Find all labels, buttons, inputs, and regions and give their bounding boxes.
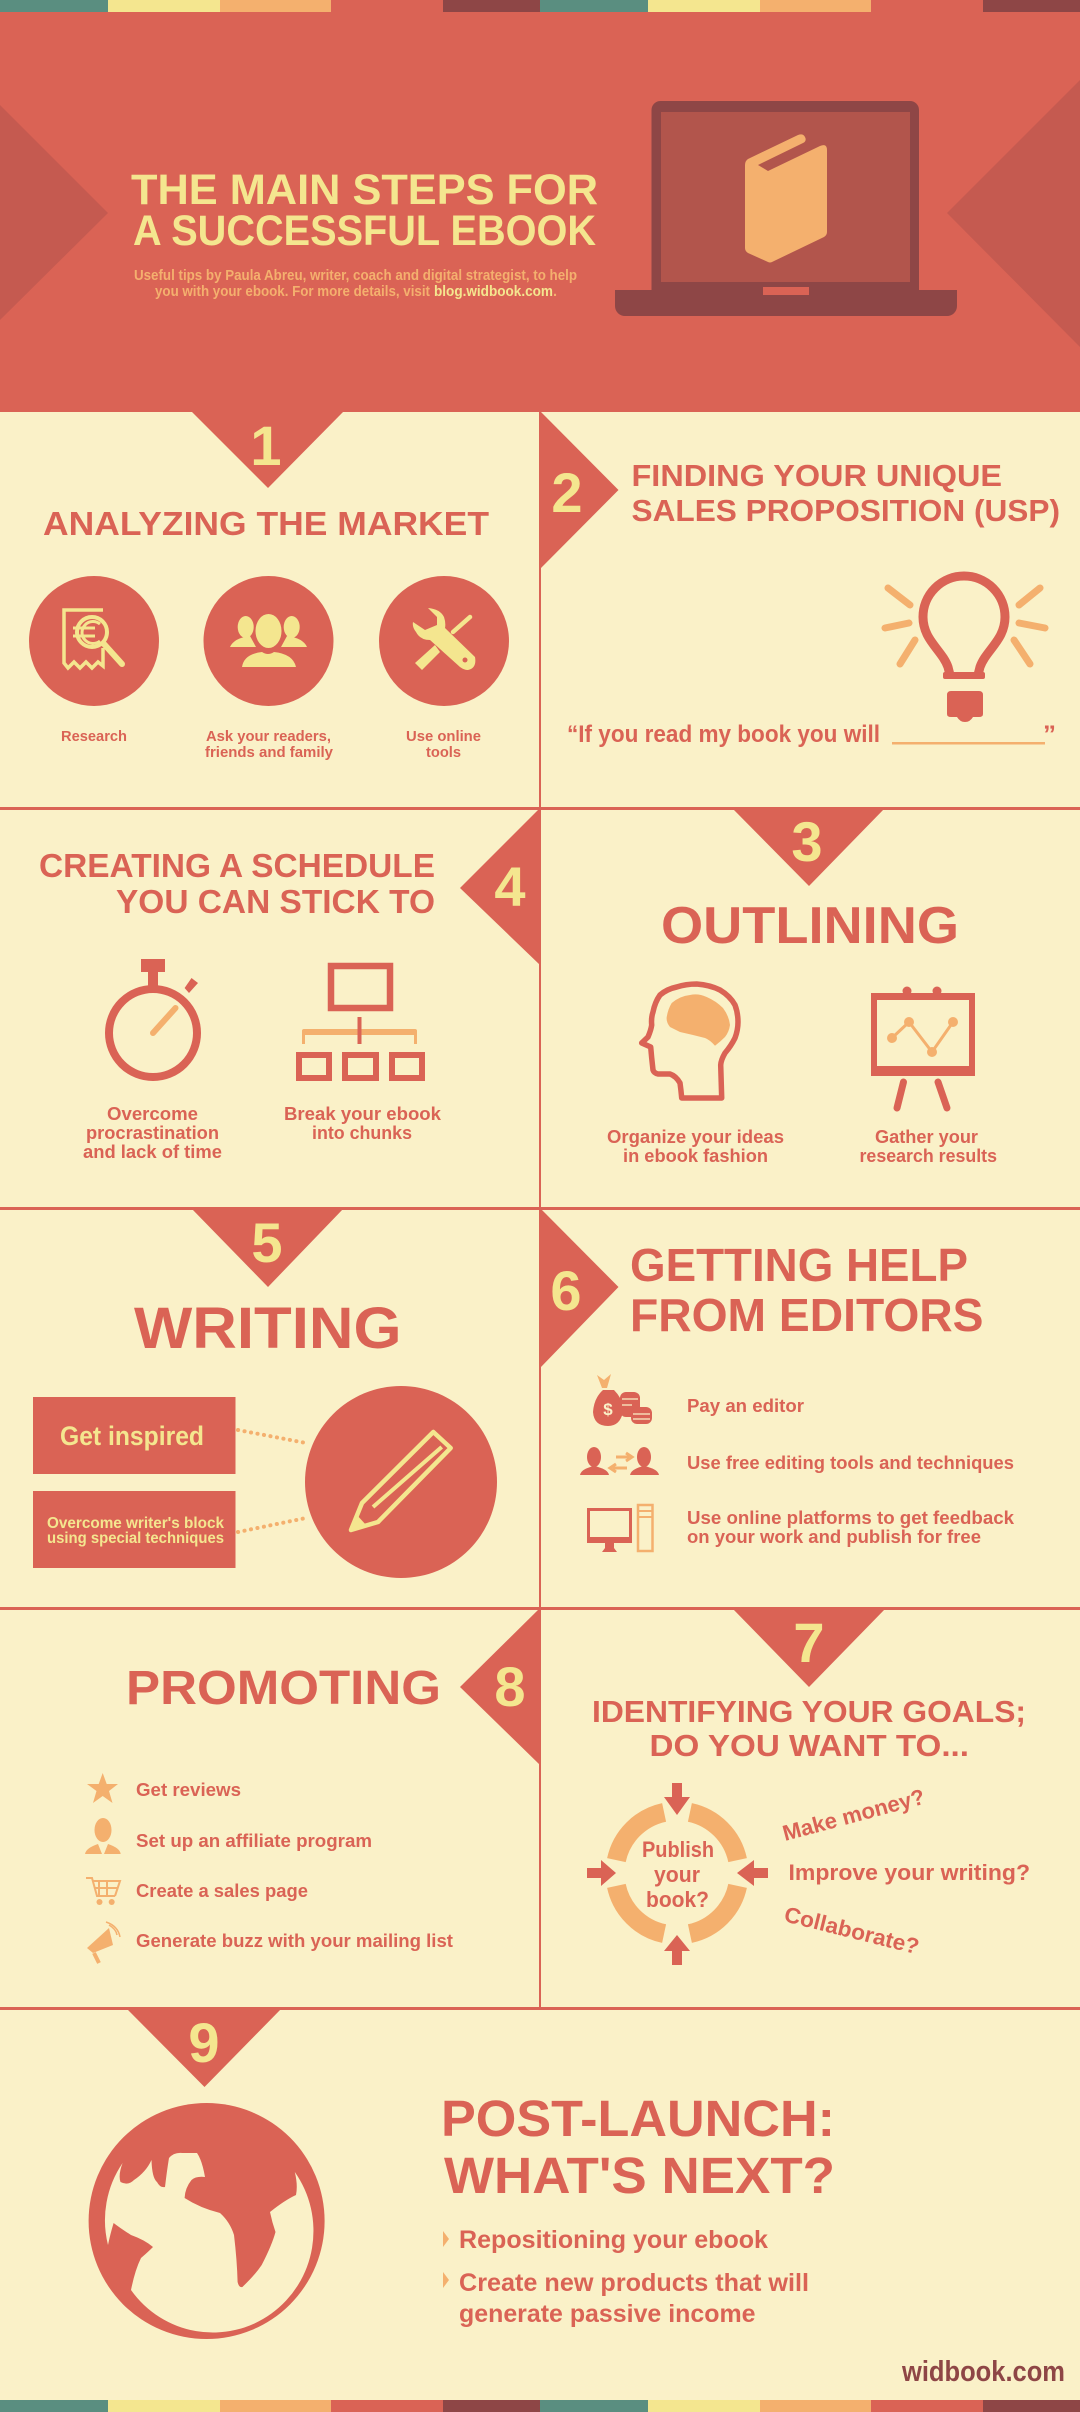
icon: money bag: $ <box>603 1400 613 1419</box>
text: generate buzz: Generate buzz with your mailing list <box>136 1931 453 1951</box>
diagram: publish cycle <box>587 1783 768 1965</box>
heading: getting help: FROM EDITORS <box>630 1289 984 1341</box>
panel: step 5 writing <box>33 1208 497 1578</box>
usp quote: ” <box>1043 721 1056 748</box>
subtitle: Useful tips by Paula Abreu, writer, coach and digital strategist, to help <box>134 268 577 284</box>
diagram: publish cycle: book? <box>646 1887 709 1912</box>
heading: finding your usp: FINDING YOUR UNIQUE <box>632 458 1002 493</box>
number badge 8 <box>460 1608 540 1765</box>
caption: ask your readers: friends and family <box>205 744 334 761</box>
panel: step 4 schedule <box>39 808 540 1162</box>
text: pay an editor: Pay an editor <box>687 1396 804 1416</box>
icon: people circle <box>204 576 334 706</box>
usp quote <box>567 721 1056 748</box>
heading: identifying your goals: IDENTIFYING YOUR GOALS; <box>592 1694 1026 1729</box>
text: improve your writing: Improve your writing? <box>788 1860 1030 1885</box>
icon: star <box>87 1773 118 1803</box>
text: online platforms: Use online platforms to get feedback <box>687 1508 1015 1528</box>
icon: research circle <box>29 576 159 706</box>
text: make money: Make money? <box>780 1784 927 1846</box>
title: A SUCCESSFUL EBOOK <box>133 207 596 255</box>
icon: org chart <box>299 966 422 1078</box>
diagram: publish cycle: your <box>654 1862 700 1887</box>
number badge 1: 1 <box>250 414 282 477</box>
panel: step 6 editors <box>540 1208 1015 1552</box>
text: sales page: Create a sales page <box>136 1881 308 1901</box>
heading: analyzing the market: ANALYZING THE MARKET <box>43 505 489 542</box>
text: get reviews: Get reviews <box>136 1780 241 1800</box>
number badge 8: 8 <box>494 1655 526 1718</box>
heading: post-launch <box>441 2090 835 2204</box>
panel: step 2 unique sales proposition <box>540 411 1060 748</box>
title <box>131 166 598 255</box>
heading: outlining: OUTLINING <box>661 897 959 955</box>
icon: computer <box>587 1505 652 1552</box>
caption: gather your research <box>860 1127 997 1166</box>
text: collaborate: Collaborate? <box>782 1902 922 1959</box>
panel: step 1 analyzing the market <box>29 411 509 761</box>
subtitle: you with your ebook. For more details, visit <box>155 284 430 300</box>
heading: finding your usp <box>632 458 1060 528</box>
heading: post-launch: POST-LAUNCH: <box>441 2090 835 2147</box>
top colour stripes <box>0 0 1080 12</box>
text: affiliate program: Set up an affiliate program <box>136 1831 372 1851</box>
caption: break your ebook <box>284 1104 442 1143</box>
panel: step 3 outlining <box>607 808 997 1166</box>
caption: gather your research: research results <box>860 1146 997 1166</box>
number badge 2 <box>540 411 618 569</box>
icon: shopping cart <box>86 1878 120 1905</box>
section dividers <box>0 410 1080 2010</box>
panel: step 8 promoting <box>85 1608 540 1963</box>
heading: creating a schedule <box>39 847 435 920</box>
number badge 4: 4 <box>494 855 526 918</box>
box: overcome writer's block <box>33 1491 236 1568</box>
heading: post-launch: WHAT'S NEXT? <box>444 2147 835 2204</box>
caption: research: Research <box>61 728 127 745</box>
number badge 1 <box>191 411 344 488</box>
icon: presentation board <box>871 986 975 1108</box>
number badge 7 <box>732 1608 886 1687</box>
number badge 9: 9 <box>188 2011 220 2074</box>
caption: overcome procrastination: and lack of time <box>83 1142 222 1162</box>
box: overcome writer's block: Overcome writer's block <box>47 1515 224 1532</box>
heading: identifying your goals <box>592 1694 1026 1763</box>
caption: ask your readers <box>205 728 334 761</box>
icon: money bag <box>593 1374 652 1426</box>
number badge 3 <box>732 808 885 886</box>
title: THE MAIN STEPS FOR <box>131 166 598 214</box>
heading: getting help <box>630 1239 984 1341</box>
number badge 2: 2 <box>551 461 583 524</box>
icon: business person <box>85 1818 121 1854</box>
number badge 9 <box>126 2008 282 2087</box>
heading: finding your usp: SALES PROPOSITION (USP) <box>632 493 1060 528</box>
caption: organize your ideas: Organize your ideas <box>607 1127 784 1147</box>
diagram: publish cycle: Publish <box>642 1837 714 1862</box>
caption: organize your ideas <box>607 1127 784 1166</box>
header band <box>0 0 1080 411</box>
bullet list: Create new products that will <box>459 2269 809 2297</box>
subtitle: . <box>553 284 557 300</box>
number badge 5 <box>191 1208 344 1287</box>
caption: overcome procrastination: procrastination <box>86 1123 219 1143</box>
subtitle <box>134 268 577 300</box>
panel: step 7 goals <box>587 1608 1030 1965</box>
bullet list <box>443 2226 809 2328</box>
heading: creating a schedule: YOU CAN STICK TO <box>116 883 435 920</box>
heading: creating a schedule: CREATING A SCHEDULE <box>39 847 435 884</box>
number badge 3: 3 <box>791 810 823 873</box>
subtitle: blog.widbook.com <box>434 284 553 300</box>
heading: identifying your goals: DO YOU WANT TO... <box>650 1728 969 1763</box>
icon: tools circle <box>379 576 509 706</box>
icon: globe <box>89 2103 325 2339</box>
icon: laptop with book <box>615 101 957 316</box>
heading: getting help: GETTING HELP <box>630 1239 968 1291</box>
caption: gather your research: Gather your <box>875 1127 978 1147</box>
caption: break your ebook: Break your ebook <box>284 1104 442 1124</box>
icon: stopwatch <box>109 959 198 1077</box>
caption: organize your ideas: in ebook fashion <box>623 1146 768 1166</box>
box: get inspired <box>33 1397 236 1474</box>
caption: overcome procrastination <box>83 1104 222 1162</box>
number badge 6: 6 <box>550 1259 582 1322</box>
number badge 5: 5 <box>251 1211 283 1274</box>
panel: step 9 post-launch <box>89 2008 1065 2388</box>
caption: use online tools <box>406 728 481 761</box>
number badge 7: 7 <box>793 1611 825 1674</box>
caption: use online tools: Use online <box>406 728 481 745</box>
bottom colour stripes <box>0 2400 1080 2412</box>
number badge 6 <box>540 1208 618 1368</box>
bullet list: generate passive income <box>459 2300 756 2328</box>
icon: people exchange <box>580 1447 659 1475</box>
box: get inspired: Get inspired <box>60 1421 204 1451</box>
text: free editing tools: Use free editing tools and techniques <box>687 1453 1014 1473</box>
dotted connectors <box>238 1430 306 1532</box>
box: overcome writer's block: using special techniques <box>47 1530 224 1547</box>
heading: writing: WRITING <box>134 1296 402 1361</box>
text: online platforms: on your work and publish for free <box>687 1527 981 1547</box>
bullet list: Repositioning your ebook <box>459 2226 768 2254</box>
usp quote: “If you read my book you will <box>567 721 880 748</box>
caption: use online tools: tools <box>426 744 461 761</box>
heading: promoting: PROMOTING <box>126 1662 441 1715</box>
icon: megaphone <box>87 1922 120 1963</box>
number badge 4 <box>460 808 540 965</box>
icon: pencil circle <box>305 1386 497 1578</box>
caption: overcome procrastination: Overcome <box>107 1104 198 1124</box>
icon: light bulb <box>885 576 1045 722</box>
text: online platforms <box>687 1508 1015 1547</box>
caption: break your ebook: into chunks <box>312 1123 412 1143</box>
caption: ask your readers: Ask your readers, <box>206 728 331 745</box>
icon: head with brain <box>642 984 738 1098</box>
